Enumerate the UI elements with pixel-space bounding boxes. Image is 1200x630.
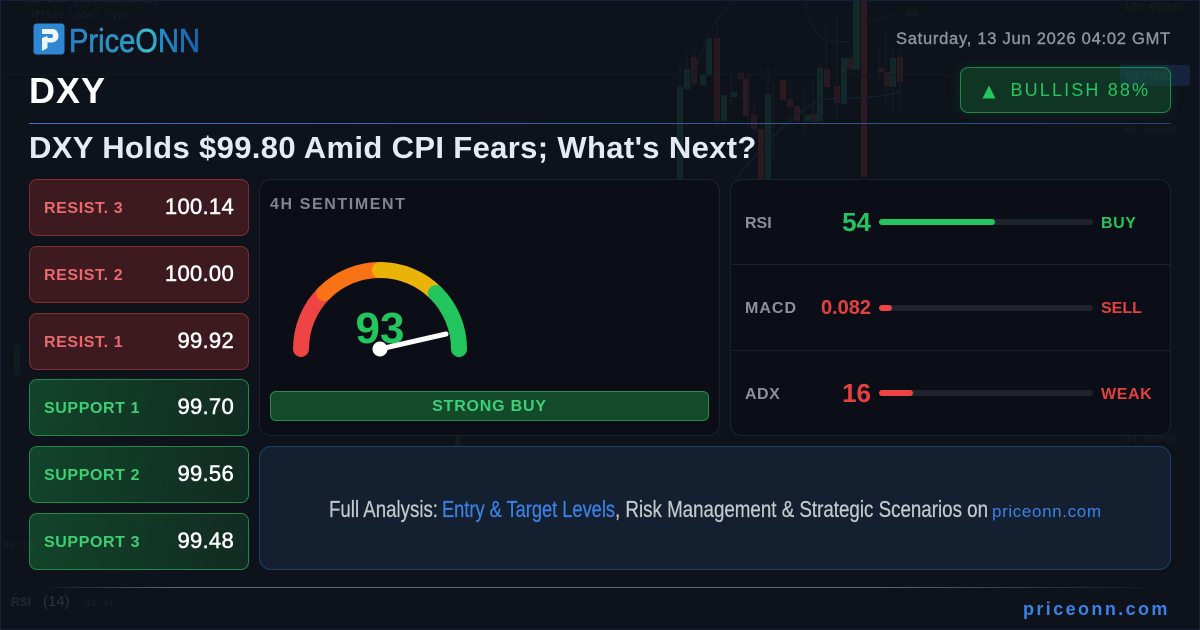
indicator: ADX bbox=[745, 378, 1152, 408]
bullish badge bbox=[960, 67, 1171, 113]
background candlestick chart: (14) bbox=[43, 593, 70, 610]
background candlestick chart: 100.00000 bbox=[1124, 2, 1183, 14]
indicator: RSI: 54 bbox=[842, 207, 871, 237]
level: support 1 bbox=[29, 379, 249, 436]
level: resistance 3: 100.14 bbox=[165, 194, 234, 219]
panel: call to action bbox=[259, 446, 1171, 570]
icon: logo mark bbox=[34, 24, 64, 54]
logo bbox=[34, 23, 200, 55]
level: support 3: SUPPORT 3 bbox=[44, 534, 140, 551]
level: resistance 2: RESIST. 2 bbox=[44, 267, 123, 284]
indicator: MACD: MACD bbox=[745, 300, 797, 317]
indicator: RSI: BUY bbox=[1101, 215, 1137, 232]
icon: up triangle bbox=[982, 86, 996, 98]
panel: 4H sentiment bbox=[259, 179, 720, 436]
background candlestick chart: 00:12 bbox=[3, 541, 33, 552]
footer url: priceonn.com bbox=[1023, 599, 1170, 619]
background candlestick chart: 99.77700 bbox=[1126, 70, 1172, 82]
sentiment verdict: STRONG BUY bbox=[432, 398, 547, 415]
indicator: RSI bbox=[745, 207, 1137, 237]
background candlestick chart: 99.60000 bbox=[1124, 125, 1177, 137]
indicator: RSI: RSI bbox=[745, 215, 772, 232]
background candlestick chart: BB bbox=[906, 9, 918, 20]
ticker heading: DXY bbox=[29, 70, 106, 111]
gauge: 93 bbox=[356, 304, 404, 353]
level: support 3 bbox=[29, 513, 249, 570]
sentiment heading: 4H SENTIMENT bbox=[270, 196, 407, 213]
call to action text: priceonn.com bbox=[992, 502, 1101, 521]
call to action text: Entry & Target Levels bbox=[442, 496, 615, 522]
background candlestick chart: 53.47 bbox=[84, 599, 114, 610]
level: support 1: SUPPORT 1 bbox=[44, 400, 140, 417]
level: resistance 1: RESIST. 1 bbox=[44, 334, 123, 351]
panel: indicators bbox=[730, 179, 1171, 436]
background candlestick chart: Offset Label Type bbox=[28, 10, 130, 22]
sentiment verdict bbox=[270, 391, 709, 421]
call to action text: , Risk Management & Strategic Scenarios on bbox=[615, 496, 988, 522]
row divider bbox=[731, 264, 1170, 265]
call to action text: Full Analysis: bbox=[329, 496, 438, 522]
headline: DXY Holds $99.80 Amid CPI Fears; What's Next? bbox=[29, 130, 757, 165]
level: support 2: 99.56 bbox=[177, 461, 234, 486]
indicator: ADX: 16 bbox=[842, 378, 871, 408]
badge text: BULLISH 88% bbox=[1010, 80, 1150, 100]
indicator: ADX: ADX bbox=[745, 386, 780, 403]
date and time: Saturday, 13 Jun 2026 04:02 GMT bbox=[896, 30, 1171, 48]
background candlestick chart: RSI bbox=[11, 595, 31, 609]
background candlestick chart: 99.00000 bbox=[1124, 434, 1177, 446]
level: resistance 2: 100.00 bbox=[165, 261, 234, 286]
indicator: ADX: WEAK bbox=[1101, 386, 1152, 403]
indicator: MACD bbox=[745, 297, 1142, 319]
level: support 1: 99.70 bbox=[177, 394, 234, 419]
level: resistance 1 bbox=[29, 313, 249, 370]
level: support 3: 99.48 bbox=[177, 528, 234, 553]
level: support 2: SUPPORT 2 bbox=[44, 467, 140, 484]
call to action text bbox=[329, 496, 1101, 522]
level: resistance 3 bbox=[29, 179, 249, 236]
level: resistance 2 bbox=[29, 246, 249, 303]
indicator: MACD: SELL bbox=[1101, 300, 1142, 317]
indicator: MACD: 0.082 bbox=[821, 297, 871, 319]
level: resistance 3: RESIST. 3 bbox=[44, 200, 123, 217]
level: support 2 bbox=[29, 446, 249, 503]
level: resistance 1: 99.92 bbox=[177, 328, 234, 353]
gauge bbox=[293, 262, 467, 357]
footer divider bbox=[40, 587, 1160, 588]
header divider bbox=[29, 123, 1171, 124]
